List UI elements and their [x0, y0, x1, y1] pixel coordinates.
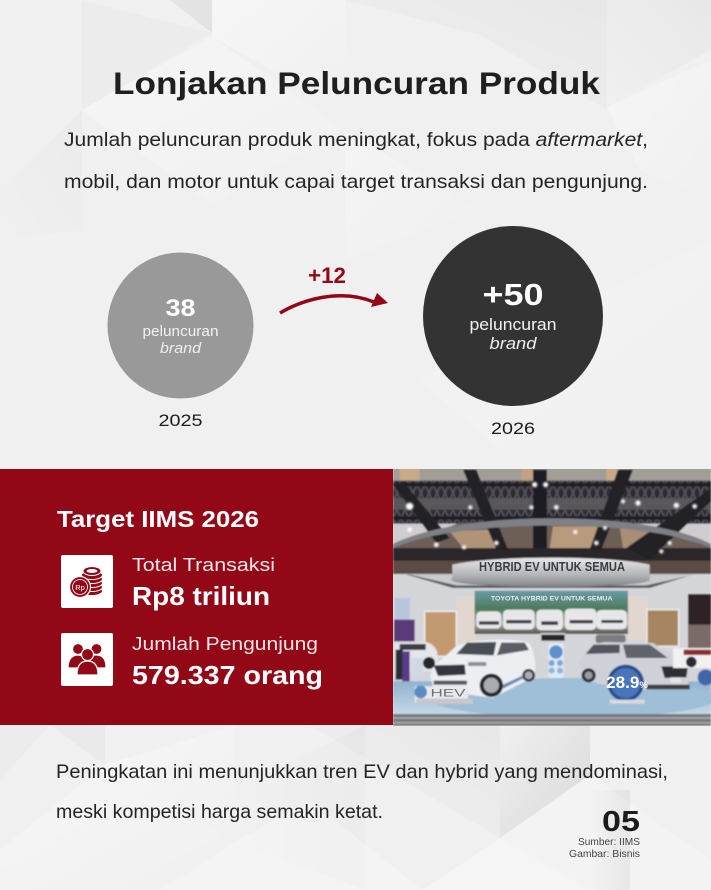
- label: total transaksi: Total Transaksi: [132, 555, 275, 575]
- panel heading: Target IIMS 2026: [57, 506, 259, 532]
- icon: visitors: [61, 633, 113, 686]
- photo: hybrid EV exhibition booth: [393, 468, 711, 728]
- title: Lonjakan Peluncuran Produk: [113, 65, 601, 101]
- comparison: 2026 circle: [423, 226, 603, 438]
- comparison: 2026 circle: +50: [482, 277, 544, 312]
- comparison: 2025 circle: peluncuran: [142, 324, 218, 340]
- page number and credits: [569, 806, 640, 860]
- page number and credits: 05: [602, 806, 640, 838]
- comparison: 2025 circle: 38: [166, 295, 196, 322]
- icon: coin stack: [61, 555, 113, 608]
- intro text: Jumlah peluncuran produk meningkat, fokus pada aftermarket ,: [64, 129, 648, 151]
- closing text: Peningkatan ini menunjukkan tren EV dan hybrid yang mendominasi,: [56, 761, 668, 783]
- comparison: 2026 circle: peluncuran: [470, 316, 556, 334]
- value: Rp8 triliun: Rp8 triliun: [132, 581, 270, 611]
- photo text: mileage badge: 28.9%: [606, 673, 649, 692]
- intro text: [64, 129, 648, 193]
- comparison: 2025 circle: [108, 252, 254, 430]
- photo text: HEV badge: HEV: [430, 687, 466, 699]
- growth arrow: +12: [280, 263, 388, 313]
- label: jumlah pengunjung: Jumlah Pengunjung: [132, 634, 318, 654]
- comparison: 2025 circle: brand: [160, 341, 202, 357]
- photo text: booth sign: HYBRID EV UNTUK SEMUA: [479, 560, 625, 574]
- photo text: screen headline: TOYOTA HYBRID EV UNTUK SEMUA: [491, 595, 613, 602]
- comparison: 2025 circle: 2025: [158, 411, 202, 430]
- comparison: 2026 circle: 2026: [491, 419, 535, 438]
- panel: target IIMS 2026: [0, 469, 393, 725]
- growth arrow: +12: +12: [308, 263, 346, 288]
- page number and credits: Gambar: Bisnis: [569, 848, 640, 860]
- icon: coin stack: Rp: [75, 583, 85, 592]
- comparison: 2026 circle: brand: [490, 335, 537, 353]
- closing text: meski kompetisi harga semakin ketat.: [56, 801, 383, 823]
- page number and credits: Sumber: IIMS: [578, 836, 640, 848]
- closing text: [56, 761, 668, 823]
- value: 579.337 orang: 579.337 orang: [132, 660, 323, 690]
- intro text: mobil, dan motor untuk capai target transaksi dan pengunjung.: [64, 171, 648, 193]
